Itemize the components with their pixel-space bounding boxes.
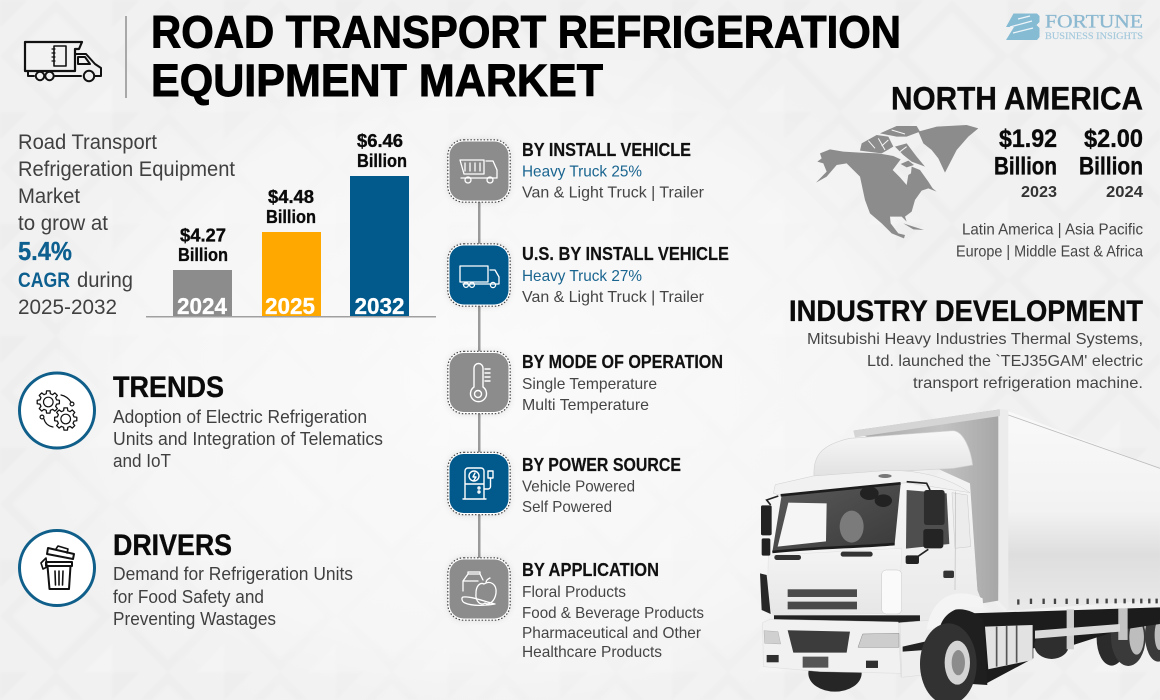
text block: trends body: Units and Integration of Telematics	[113, 429, 383, 449]
text block: market growth: Refrigeration Equipment	[18, 158, 235, 181]
text: by application	[522, 560, 704, 661]
text block: market growth: Road Transport	[18, 131, 157, 154]
bar: 2025: $4.48	[268, 187, 314, 207]
text block: drivers body: for Food Safety and	[113, 587, 264, 607]
stat: 2023 market value: 2023	[1021, 184, 1057, 201]
text: by mode of operation: Single Temperature	[522, 376, 657, 393]
icon: thermometer	[448, 351, 510, 414]
cab step	[900, 620, 933, 677]
text: U.S. by install vehicle: Van & Light Truck | Trailer	[522, 289, 705, 306]
text block: drivers body: Preventing Wastages	[113, 609, 276, 629]
text block: market growth	[18, 131, 235, 319]
icon: gears	[20, 373, 94, 448]
segment: by mode of operation	[448, 351, 723, 414]
text block: market growth: 2025-2032	[18, 296, 117, 319]
roof fairing	[814, 431, 973, 476]
panel: drivers	[20, 529, 353, 629]
text: by mode of operation	[522, 352, 723, 414]
text: by application: Food & Beverage Products	[522, 605, 704, 622]
stat: 2024 market value: 2024	[1106, 184, 1143, 201]
bar: 2025	[262, 187, 321, 319]
icon: food and beverage	[448, 558, 510, 620]
bar chart	[146, 131, 436, 319]
text block: industry development: Ltd. launched the `TEJ35GAM' electric	[867, 353, 1143, 370]
CAGR value: 5.4%	[18, 236, 72, 266]
text block: industry development	[807, 331, 1143, 392]
front bumper	[763, 619, 901, 673]
text: by install vehicle: Heavy Truck 25%	[522, 164, 642, 180]
roof visor	[773, 471, 970, 495]
text: by mode of operation: BY MODE OF OPERATION	[522, 352, 723, 372]
left front wheel	[808, 655, 862, 692]
cab side and door	[894, 483, 983, 677]
title	[151, 6, 901, 106]
text: by application: Floral Products	[522, 584, 626, 601]
icon: dump truck	[448, 140, 510, 202]
stat: 2023 market value: $1.92	[999, 125, 1057, 153]
bar: 2025: 2025	[265, 293, 315, 319]
stat: 2023 market value: Billion	[994, 152, 1057, 180]
icon: box truck	[448, 244, 510, 306]
text block: other regions	[956, 222, 1143, 260]
door window	[906, 490, 949, 549]
text: by power source: Vehicle Powered	[522, 478, 635, 496]
text block: trends body	[113, 407, 383, 471]
bar: 2032: $6.46	[357, 131, 403, 151]
front wheel	[920, 593, 987, 700]
text: by power source: BY POWER SOURCE	[522, 455, 681, 475]
text: by application: BY APPLICATION	[522, 560, 659, 580]
segment: U.S. by install vehicle	[448, 244, 729, 306]
logo: Fortune Business Insights: FORTUNE	[1045, 12, 1143, 32]
text: by mode of operation: Multi Temperature	[522, 397, 649, 414]
text: U.S. by install vehicle	[522, 244, 729, 306]
connector line	[478, 200, 480, 560]
text block: trends body: Adoption of Electric Refrigeration	[113, 407, 367, 427]
bar: 2024: $4.27	[180, 226, 226, 246]
text block: market growth: Market	[18, 185, 80, 208]
chassis	[973, 607, 1160, 683]
text block: other regions: Europe | Middle East & Africa	[956, 244, 1143, 260]
illustration: white refrigerated truck	[760, 409, 1160, 700]
heading: trends: TRENDS	[113, 371, 224, 404]
mirrors	[761, 505, 772, 535]
icon: refrigerated truck	[25, 42, 101, 81]
text: by application: Pharmaceutical and Other	[522, 625, 702, 642]
logo: Fortune Business Insights: BUSINESS INSIGHTS	[1045, 32, 1143, 42]
bar: 2024: Billion	[178, 245, 228, 265]
text block: market growth: during	[77, 269, 133, 292]
icon: charging station	[448, 452, 510, 515]
text block: market growth: to grow at	[18, 212, 108, 235]
bar: 2024	[173, 226, 232, 319]
bar: 2032: Billion	[357, 151, 407, 171]
text: by application: Healthcare Products	[522, 644, 662, 661]
segment: by application	[448, 558, 704, 661]
text: by power source: Self Powered	[522, 499, 612, 516]
heading: drivers: DRIVERS	[113, 529, 232, 562]
bar: 2025: Billion	[266, 207, 316, 227]
text: by install vehicle	[522, 140, 705, 202]
text block: other regions: Latin America | Asia Pacific	[962, 222, 1143, 238]
title: ROAD TRANSPORT REFRIGERATION	[151, 6, 901, 58]
text: U.S. by install vehicle: U.S. BY INSTALL VEHICLE	[522, 244, 729, 264]
cab front panel	[767, 549, 902, 615]
fuel tank	[985, 625, 1033, 669]
bar: 2032: 2032	[354, 293, 404, 319]
text: by install vehicle: BY INSTALL VEHICLE	[522, 140, 691, 160]
text block: drivers body: Demand for Refrigeration Units	[113, 564, 353, 584]
cab	[760, 471, 983, 677]
text: by power source	[522, 455, 681, 516]
text block: industry development: transport refrigeration machine.	[913, 375, 1143, 392]
segment: by power source	[448, 452, 681, 516]
text block: industry development: Mitsubishi Heavy Industries Thermal Systems,	[807, 331, 1143, 348]
heading: North America: NORTH AMERICA	[891, 80, 1143, 116]
logo: Fortune Business Insights	[1006, 12, 1143, 42]
stat: 2024 market value: Billion	[1079, 152, 1143, 180]
bar: 2024: 2024	[177, 293, 227, 319]
stat: 2024 market value	[1079, 125, 1143, 201]
title: EQUIPMENT MARKET	[151, 55, 603, 106]
segment: by install vehicle	[448, 140, 705, 202]
text: U.S. by install vehicle: Heavy Truck 27%	[522, 268, 642, 285]
panel: trends	[20, 371, 383, 471]
bar: 2032	[350, 131, 409, 319]
text block: trends body: and IoT	[113, 451, 171, 471]
text block: drivers body	[113, 564, 353, 629]
stat: 2023 market value	[994, 125, 1057, 201]
windshield	[772, 484, 901, 552]
cargo box	[853, 409, 1160, 611]
text block: market growth: CAGR	[18, 269, 70, 292]
text: by install vehicle: Van & Light Truck | Trailer	[522, 184, 705, 202]
rear wheels	[1097, 608, 1160, 666]
map: North America	[816, 125, 978, 238]
header divider	[125, 16, 127, 98]
icon: waste bin	[20, 530, 94, 606]
stat: 2024 market value: $2.00	[1084, 125, 1143, 153]
